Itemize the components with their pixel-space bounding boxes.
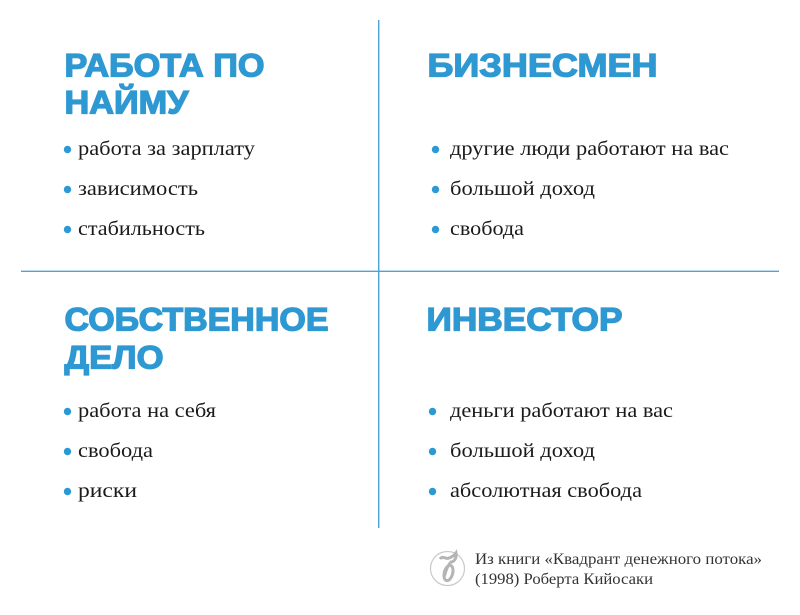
- source text: [475, 551, 762, 588]
- list: investor traits: большой доход: [450, 440, 595, 462]
- list: investor traits: [429, 400, 673, 502]
- heading: employee: [64, 48, 264, 120]
- list: employee traits: [64, 138, 255, 240]
- source note: [430, 551, 762, 588]
- panel: investor quadrant: [426, 302, 673, 502]
- list: businessman traits: другие люди работают на вас: [450, 138, 729, 160]
- heading: self-employed: ДЕЛО: [64, 340, 164, 376]
- heading: investor: ИНВЕСТОР: [426, 302, 622, 338]
- panel: employee quadrant: [64, 48, 264, 240]
- list: businessman traits: свобода: [450, 218, 524, 240]
- list: self-employed traits: работа на себя: [78, 400, 216, 422]
- list: self-employed traits: свобода: [78, 440, 153, 462]
- heading: self-employed: СОБСТВЕННОЕ: [64, 302, 328, 338]
- list: self-employed traits: [64, 400, 216, 502]
- heading: businessman: БИЗНЕСМЕН: [428, 48, 658, 84]
- source text: (1998) Роберта Кийосаки: [475, 571, 653, 588]
- list: investor traits: абсолютная свобода: [450, 480, 642, 502]
- heading: employee: НАЙМУ: [64, 84, 190, 120]
- list: employee traits: стабильность: [78, 218, 205, 240]
- icon: publisher logo: [430, 552, 464, 586]
- list: investor traits: деньги работают на вас: [450, 400, 673, 422]
- panel: self-employed quadrant: [64, 302, 329, 502]
- source text: Из книги «Квадрант денежного потока»: [475, 551, 762, 568]
- list: employee traits: работа за зарплату: [78, 138, 255, 160]
- heading: employee: РАБОТА ПО: [64, 48, 264, 84]
- list: employee traits: зависимость: [78, 178, 198, 200]
- list: self-employed traits: риски: [78, 480, 137, 502]
- list: businessman traits: большой доход: [450, 178, 595, 200]
- heading: self-employed: [64, 302, 328, 376]
- panel: businessman quadrant: [428, 48, 729, 240]
- list: businessman traits: [432, 138, 729, 240]
